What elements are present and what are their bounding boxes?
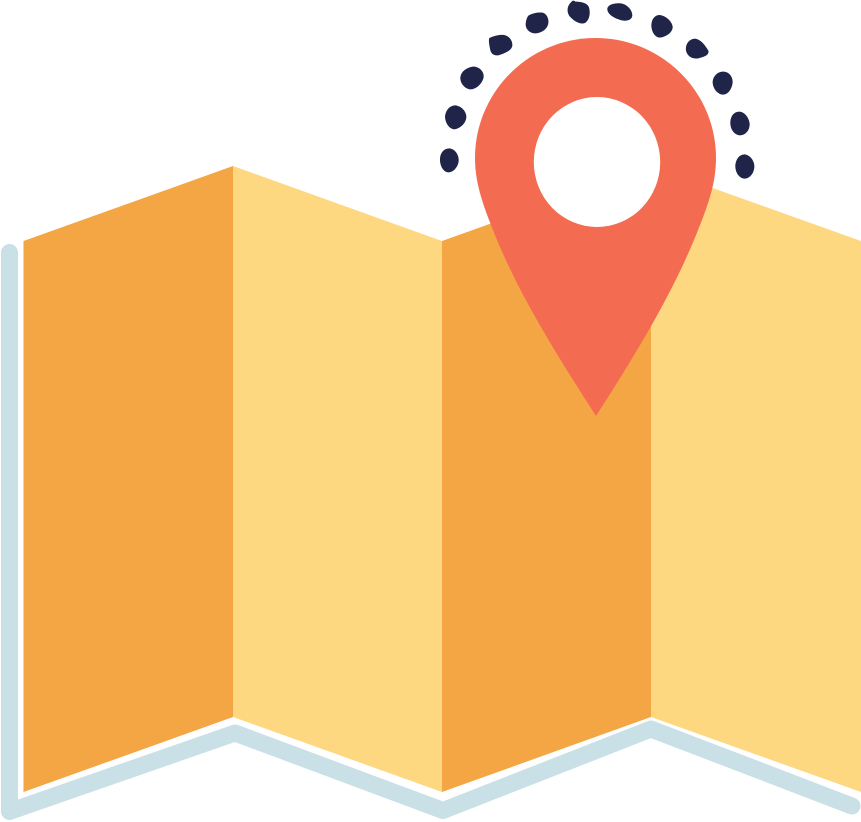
dotted halo (440, 1, 754, 179)
map panel 4 (651, 166, 861, 792)
map panel 1 (24, 166, 233, 792)
map panel 2 (233, 166, 442, 792)
map shadow outline (10, 252, 852, 812)
map panel 3 (442, 166, 651, 792)
pin hole (534, 97, 660, 227)
location pin (475, 38, 716, 416)
